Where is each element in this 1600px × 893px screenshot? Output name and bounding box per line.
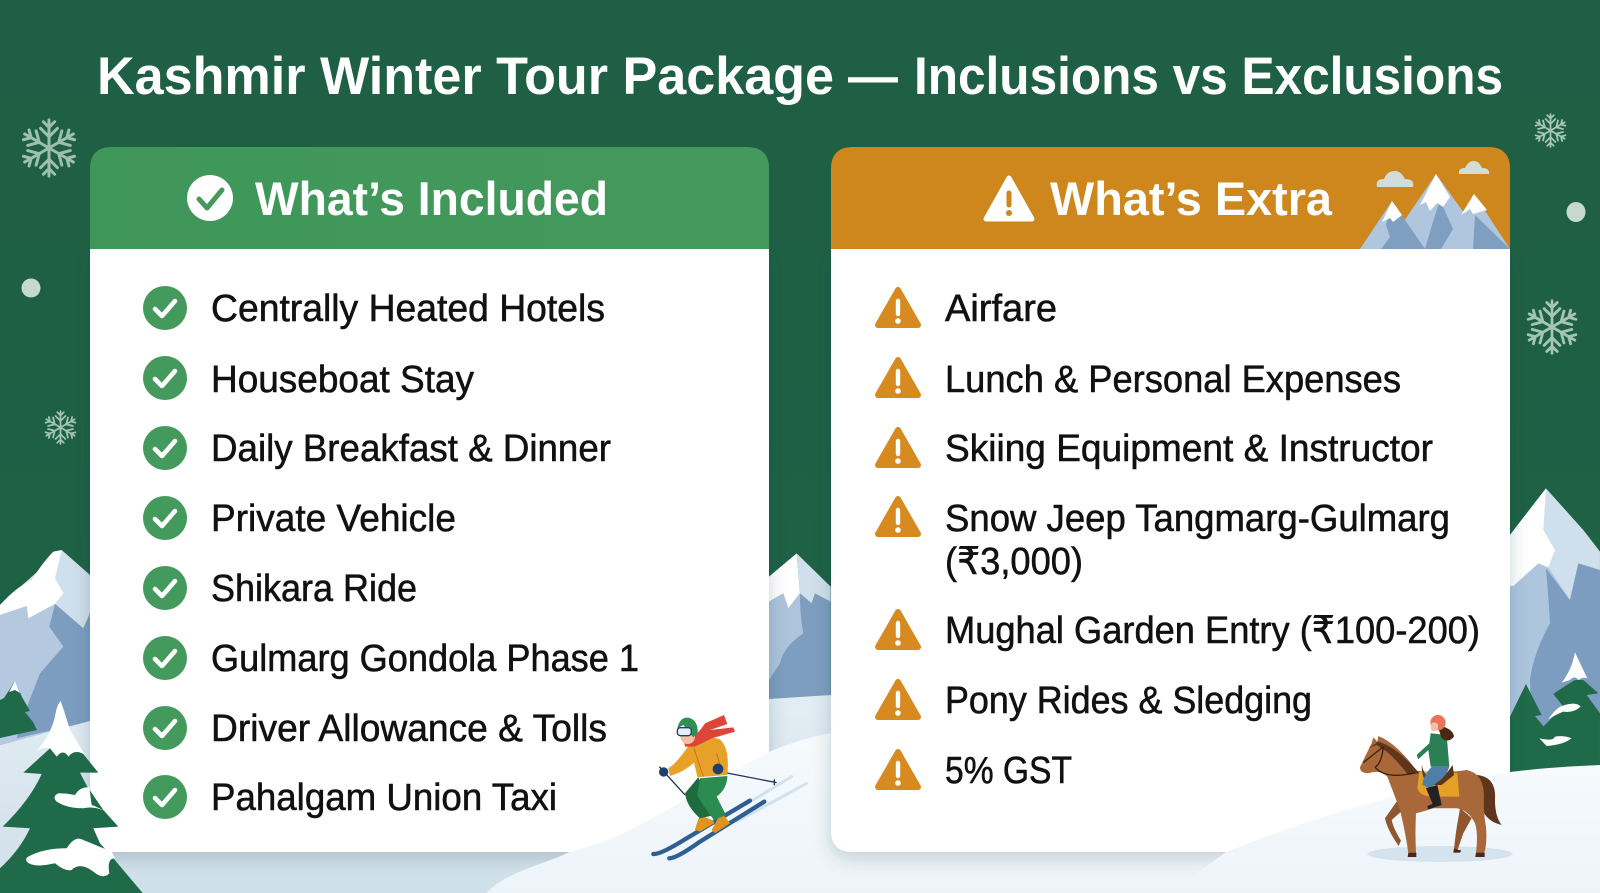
icon: check xyxy=(143,775,187,819)
label: Shikara Ride xyxy=(211,568,417,610)
label: Pony Rides & Sledging xyxy=(945,680,1312,722)
snowflake: top left xyxy=(20,120,78,176)
icon: warning xyxy=(878,430,918,465)
panel: what's included xyxy=(90,147,769,852)
icon: warning xyxy=(878,360,918,395)
label: Airfare xyxy=(945,288,1057,330)
base snow ground xyxy=(0,695,1600,893)
icon: warning xyxy=(878,290,918,325)
item: pahalgam union taxi xyxy=(143,775,557,819)
item: shikara ride xyxy=(143,566,417,610)
item: lunch and personal expenses xyxy=(878,359,1401,401)
item: snow jeep xyxy=(878,498,1450,583)
label: Daily Breakfast & Dinner xyxy=(211,428,611,470)
mountains and trees: right xyxy=(1510,488,1600,777)
label: Centrally Heated Hotels xyxy=(211,288,605,330)
item: airfare xyxy=(878,288,1057,330)
item: mughal garden entry xyxy=(878,610,1480,652)
icon: check xyxy=(143,566,187,610)
item: daily breakfast and dinner xyxy=(143,426,611,470)
label: Driver Allowance & Tolls xyxy=(211,708,607,750)
icon: warning xyxy=(878,612,918,647)
mountains: left xyxy=(0,550,90,745)
item: skiing equipment and instructor xyxy=(878,428,1433,470)
icon: check xyxy=(143,426,187,470)
snow dot: right xyxy=(1566,202,1586,222)
snowflake: left xyxy=(44,411,77,444)
item: centrally heated hotels xyxy=(143,286,605,330)
card body xyxy=(90,249,769,852)
item: driver allowance and tolls xyxy=(143,706,607,750)
icon: warning xyxy=(878,752,918,787)
item: pony rides and sledging xyxy=(878,680,1312,722)
icon: check xyxy=(143,636,187,680)
item: private vehicle xyxy=(143,496,456,540)
snow dot: left xyxy=(22,278,40,298)
small pine tree: left xyxy=(0,681,37,738)
label: Mughal Garden Entry (₹100-200) xyxy=(945,610,1480,652)
card header xyxy=(90,147,769,249)
label: Skiing Equipment & Instructor xyxy=(945,428,1433,470)
snow hill: centre foreground xyxy=(486,733,1300,893)
icon: check xyxy=(143,496,187,540)
illustration: skier xyxy=(653,715,807,858)
label line 1: Snow Jeep Tangmarg-Gulmarg xyxy=(945,498,1450,540)
title: — xyxy=(848,47,898,106)
snow hill: right foreground xyxy=(1170,765,1600,893)
item: gst xyxy=(878,750,1072,792)
label: Pahalgam Union Taxi xyxy=(211,777,557,819)
label: 5% GST xyxy=(945,750,1072,792)
heading: what's extra: What’s Extra xyxy=(1050,172,1333,225)
panel: what's extra xyxy=(831,147,1510,852)
icon: warning xyxy=(878,682,918,717)
icon: check xyxy=(143,356,187,400)
icon: check xyxy=(143,706,187,750)
illustration: header mountains xyxy=(1360,161,1510,249)
illustration: horse and rider xyxy=(1360,715,1513,862)
icon: header warning xyxy=(986,178,1032,219)
snowflake: top right xyxy=(1534,114,1567,147)
icon: warning xyxy=(878,499,918,534)
title: Inclusions vs Exclusions xyxy=(914,47,1503,106)
label: Private Vehicle xyxy=(211,498,456,540)
item: gulmarg gondola phase 1 xyxy=(143,636,639,680)
illustration: pine tree with snow, left foreground xyxy=(0,701,143,893)
item: houseboat stay xyxy=(143,356,474,401)
title: Kashmir Winter Tour Package xyxy=(97,47,834,106)
icon: check xyxy=(143,286,187,330)
heading: what's included: What’s Included xyxy=(255,172,608,225)
icon: header check xyxy=(187,175,233,221)
snowflake: right xyxy=(1525,301,1579,353)
label: Houseboat Stay xyxy=(211,359,474,401)
title xyxy=(97,47,1503,106)
label: Lunch & Personal Expenses xyxy=(945,359,1401,401)
card body xyxy=(831,249,1510,852)
label: Gulmarg Gondola Phase 1 xyxy=(211,638,639,680)
card header xyxy=(831,147,1510,249)
mountains: middle xyxy=(769,553,831,700)
label line 2: (₹3,000) xyxy=(945,541,1083,583)
